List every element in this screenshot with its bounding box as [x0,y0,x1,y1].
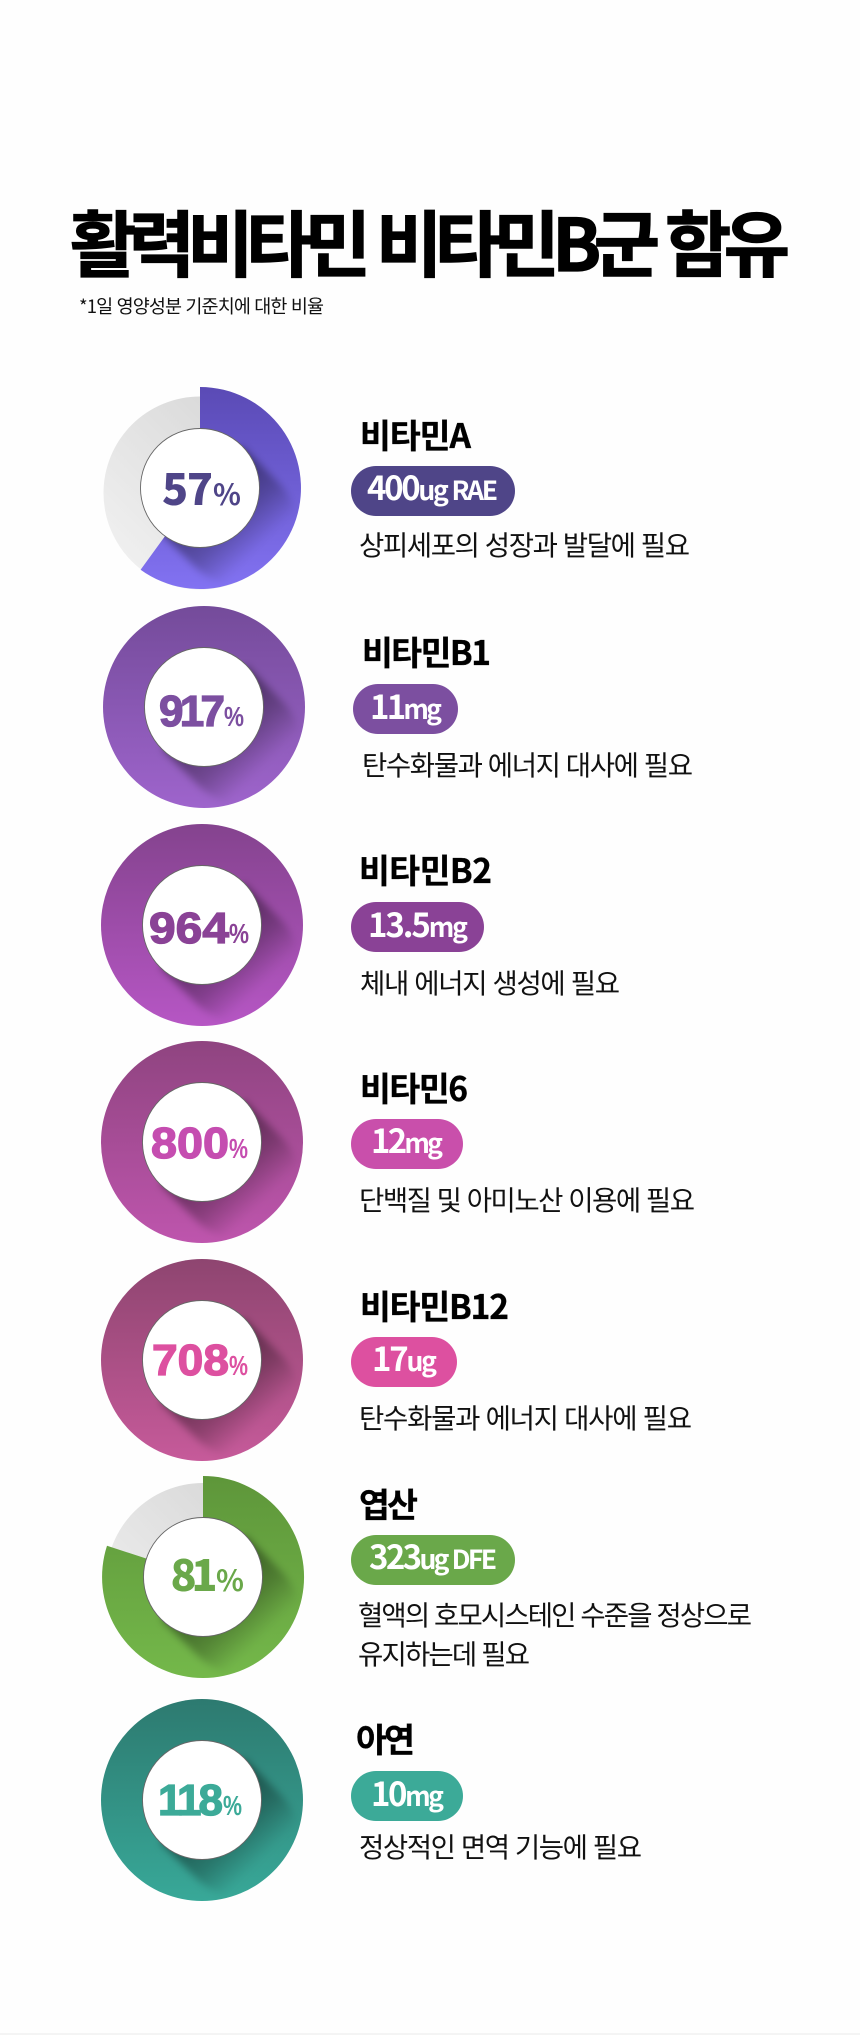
amount pill: 17ug [372,1333,437,1381]
heading: 비타민B12 [360,1280,509,1329]
donut chart: 57% [104,387,301,590]
donut chart: 708% [101,1259,303,1461]
amount pill: 12mg [371,1115,443,1163]
amount pill [353,681,458,734]
donut chart: 964% [101,824,303,1026]
description: 단백질 및 아미노산 이용에 필요 [359,1178,695,1218]
heading: 비타민6 [360,1062,468,1111]
description: 체내 에너지 생성에 필요 [360,961,620,1001]
row: zinc [101,1699,642,1901]
amount pill: 11mg [370,681,442,729]
row: vitamin B12 [101,1259,692,1461]
donut chart: 57%: 57 [162,456,213,518]
donut chart: 917%: % [224,701,244,732]
heading: 비타민B2 [359,844,492,893]
row: folate [102,1476,752,1678]
description: 유지하는데 필요 [358,1632,530,1672]
row: vitamin B2 [101,824,620,1026]
donut chart: 964%: % [229,918,249,949]
donut chart: 81% [102,1476,304,1678]
amount pill [351,899,484,952]
amount pill [351,1333,457,1387]
amount pill [351,1531,515,1585]
amount pill: 323ug DFE [369,1531,497,1579]
donut chart: 800%: 800 [151,1119,229,1168]
donut chart: 917%: 917 [159,687,225,736]
donut chart: 118% [101,1699,303,1901]
description [358,1593,752,1672]
description: 혈액의 호모시스테인 수준을 정상으로 [358,1593,752,1633]
donut chart: 917% [103,606,305,808]
amount pill [351,1768,463,1821]
donut chart: 964%: 964 [149,904,230,953]
row: vitamin A [104,387,690,590]
amount pill [351,1115,463,1169]
heading: 비타민A [360,409,472,458]
amount pill: 10mg [371,1768,444,1816]
amount pill: 400ug RAE [367,462,498,510]
heading: 비타민B1 [362,626,491,675]
row: vitamin B1 [103,606,693,808]
donut chart: 800% [101,1041,303,1243]
donut chart: 118%: 118 [158,1776,223,1825]
description: 정상적인 면역 기능에 필요 [359,1825,642,1865]
donut chart: 81%: % [216,1558,244,1600]
description: 탄수화물과 에너지 대사에 필요 [362,743,693,783]
donut chart: 81%: 81 [170,1542,218,1604]
heading: 엽산 [359,1478,418,1527]
donut chart: 800%: % [229,1133,248,1164]
donut chart: 708%: % [229,1350,248,1381]
heading: 아연 [356,1713,415,1762]
description: 상피세포의 성장과 발달에 필요 [359,523,690,563]
donut chart: 708%: 708 [152,1336,229,1385]
donut chart: 118%: % [223,1790,242,1821]
donut chart: 57%: % [213,472,241,514]
row: vitamin B6 [101,1041,695,1243]
title: 활력비타민 비타민B군 함유 [70,187,790,292]
description: 탄수화물과 에너지 대사에 필요 [359,1396,692,1436]
amount pill: 13.5mg [368,899,468,947]
footnote: *1일 영양성분 기준치에 대한 비율 [79,293,324,319]
